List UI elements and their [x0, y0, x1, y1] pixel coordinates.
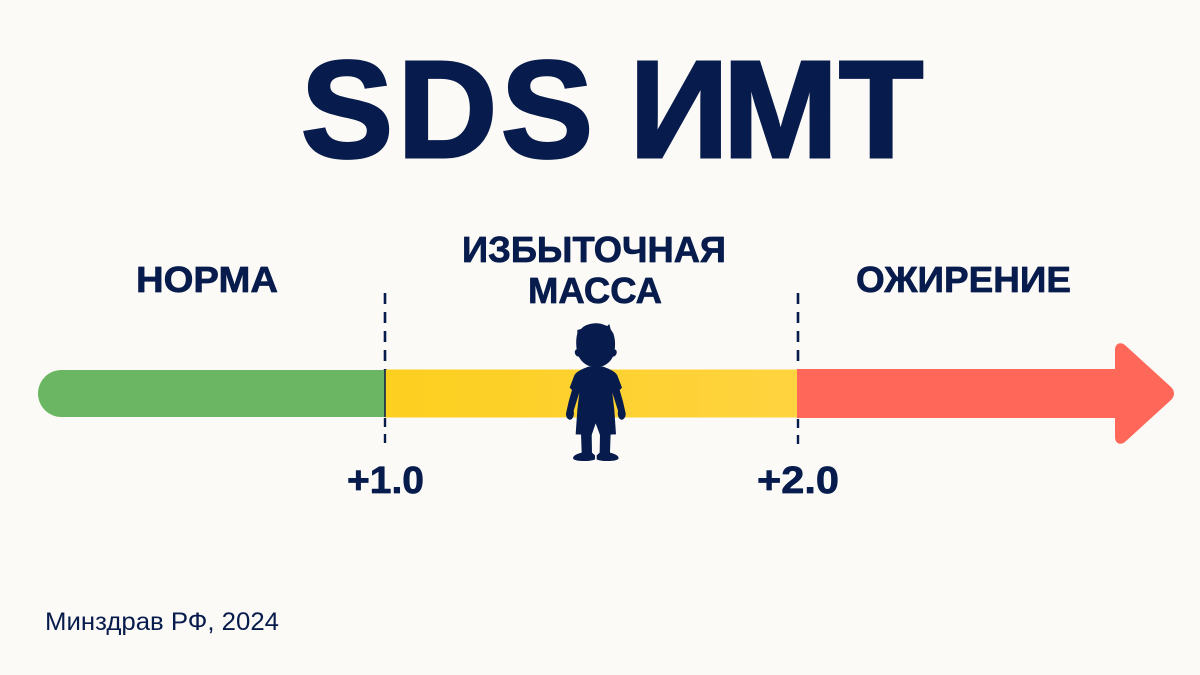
source note: Минздрав РФ, 2024 — [45, 608, 279, 636]
green segment: norm — [38, 370, 385, 417]
label: избыточная масса — [462, 229, 726, 311]
label: норма: НОРМА — [136, 259, 278, 300]
threshold marker +2.0: +2.0 — [757, 460, 839, 502]
threshold marker +1.0: +1.0 — [347, 460, 424, 502]
label: избыточная масса: МАССА — [528, 270, 662, 311]
icon: child silhouette — [566, 323, 626, 461]
label: избыточная масса: ИЗБЫТОЧНАЯ — [462, 229, 726, 270]
label: ожирение: ОЖИРЕНИЕ — [856, 259, 1071, 300]
title: SDS ИМТ — [301, 33, 923, 187]
yellow segment: overweight — [385, 370, 798, 418]
arrow scale bar — [38, 343, 1174, 444]
red arrow segment: obesity — [797, 343, 1174, 444]
